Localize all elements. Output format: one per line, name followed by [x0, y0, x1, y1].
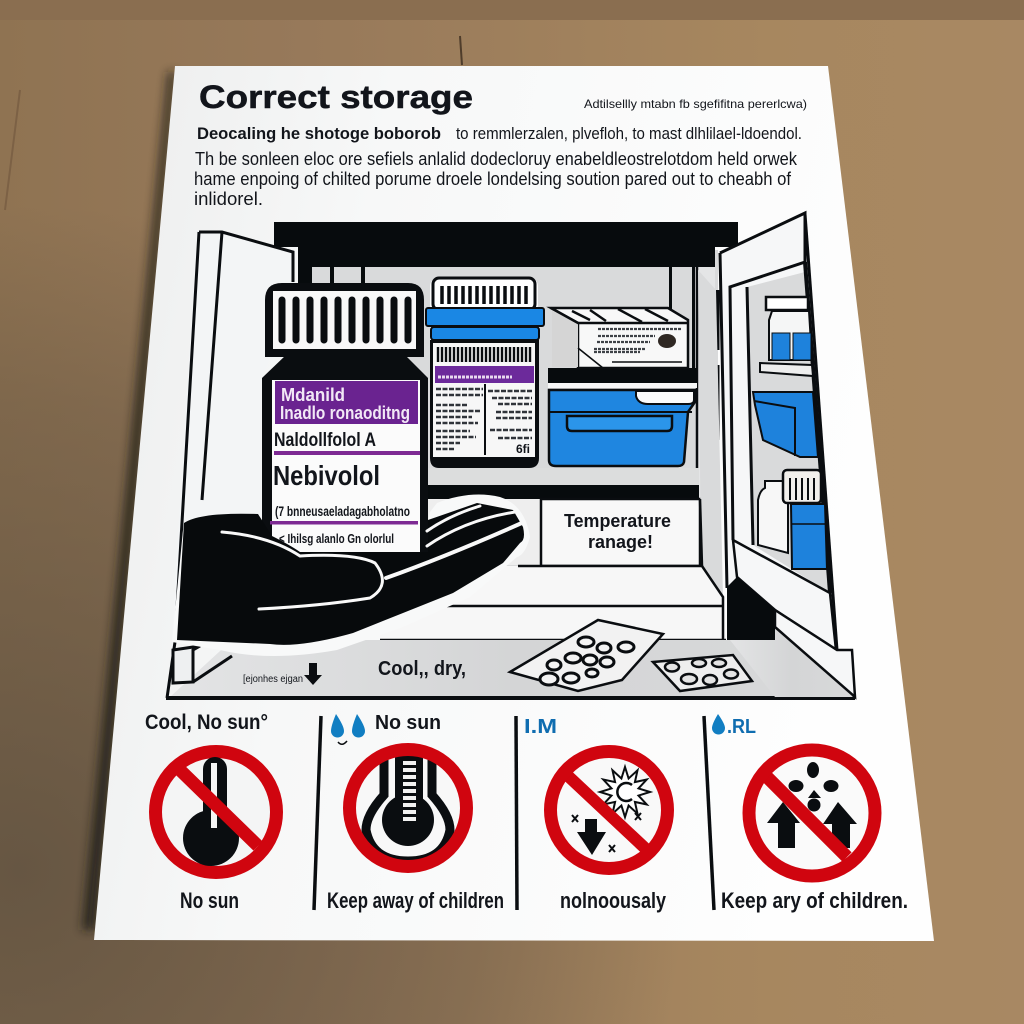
- hand holding bottle: [177, 503, 524, 645]
- bottle body: [262, 355, 428, 556]
- rule 1 caption: No sun: [180, 888, 239, 913]
- illustration: open medicine cabinet: [166, 213, 855, 698]
- center bottle: 6fi: [516, 442, 530, 456]
- body paragraph: inlidorel.: [194, 189, 263, 209]
- icon: thermometer in red ring: [350, 750, 466, 866]
- temperature label: ranage!: [588, 532, 653, 552]
- body paragraph: hame enpoing of chilted porume droele londelsing soution pared out to cheabh of: [194, 169, 792, 189]
- divider: [516, 716, 517, 910]
- large Nebivolol bottle: [262, 283, 428, 556]
- icon: crossed arrows and dots: [749, 750, 875, 876]
- rule 4 caption: Keep ary of children.: [721, 888, 908, 913]
- cardboard medicine box: [551, 308, 689, 368]
- rule 2 caption: Keep away of children: [327, 888, 504, 913]
- cabinet left door: [167, 231, 294, 698]
- door bin: [753, 392, 818, 457]
- panel: rule 2 - no sun: [327, 712, 504, 913]
- floor caption with arrow: [243, 663, 322, 685]
- subtitle line: to remmlerzalen, plvefloh, to mast dlhlilael-ldoendol.: [456, 124, 802, 143]
- floor caption with arrow: [ejonhes ejgan: [243, 674, 303, 685]
- label purple band: [272, 380, 420, 553]
- blister pack large: [510, 620, 663, 691]
- temperature label: [541, 499, 700, 566]
- subtitle line: Deocaling he shotoge boborob: [197, 124, 441, 143]
- blister pack small: [653, 655, 752, 691]
- poster panel: [94, 66, 934, 941]
- label purple band: Mdanild: [281, 385, 345, 405]
- panel: rule 3 - light: [524, 716, 668, 913]
- rule 1 heading: Cool, No sun°: [145, 711, 268, 734]
- icon: water drop: [712, 714, 725, 735]
- divider: [704, 716, 714, 910]
- floor caption: cool, dry: Cool,, dry,: [378, 658, 466, 680]
- icon: crossed sun and arrow: [550, 752, 668, 868]
- bottle cap: [265, 283, 424, 357]
- door bottle: [766, 297, 812, 360]
- body paragraph: Th be sonleen eloc ore sefiels anlalid dodecloruy enabeldleostrelotdom held orwek: [195, 149, 798, 169]
- shelves: [428, 368, 699, 565]
- hand outline halo: [172, 495, 530, 656]
- cabinet interior: [274, 222, 738, 570]
- large Nebivolol bottle: < Ihilsg alanlo Gn olorlul: [279, 531, 394, 546]
- temperature label: Temperature: [564, 511, 671, 531]
- rule 4 heading: .RL: [727, 716, 756, 738]
- large Nebivolol bottle: (7 bnneusaeladagabholatno: [275, 503, 410, 519]
- icon: water drops: [331, 714, 365, 744]
- rule 3 caption: nolnoousaly: [560, 888, 667, 913]
- icon: crossed thermometer: [156, 752, 276, 872]
- center bottle: [426, 278, 544, 468]
- title: Correct storage: [199, 79, 473, 115]
- lower floor of cabinet: [170, 270, 854, 697]
- body paragraph: [194, 149, 798, 209]
- panel: rule 1 - cool: [145, 711, 276, 913]
- large Nebivolol bottle: Nebivolol: [273, 460, 380, 491]
- cabinet right door: [720, 213, 855, 697]
- door bottles: [758, 470, 827, 569]
- divider: [314, 716, 321, 910]
- frame baseline: [166, 696, 855, 700]
- label drug lines: Naldollfolol A: [274, 430, 376, 451]
- rule 2 heading: No sun: [375, 712, 441, 734]
- header note: Adtilsellly mtabn fb sgefifitna pererlcwa): [584, 97, 807, 111]
- label purple band: Inadlo ronaoditng: [280, 403, 410, 423]
- door shelf: [760, 363, 813, 376]
- blue storage bin: [549, 390, 695, 466]
- panel: rule 4 - children: [712, 714, 908, 913]
- rule 3 heading: I.M: [524, 716, 557, 738]
